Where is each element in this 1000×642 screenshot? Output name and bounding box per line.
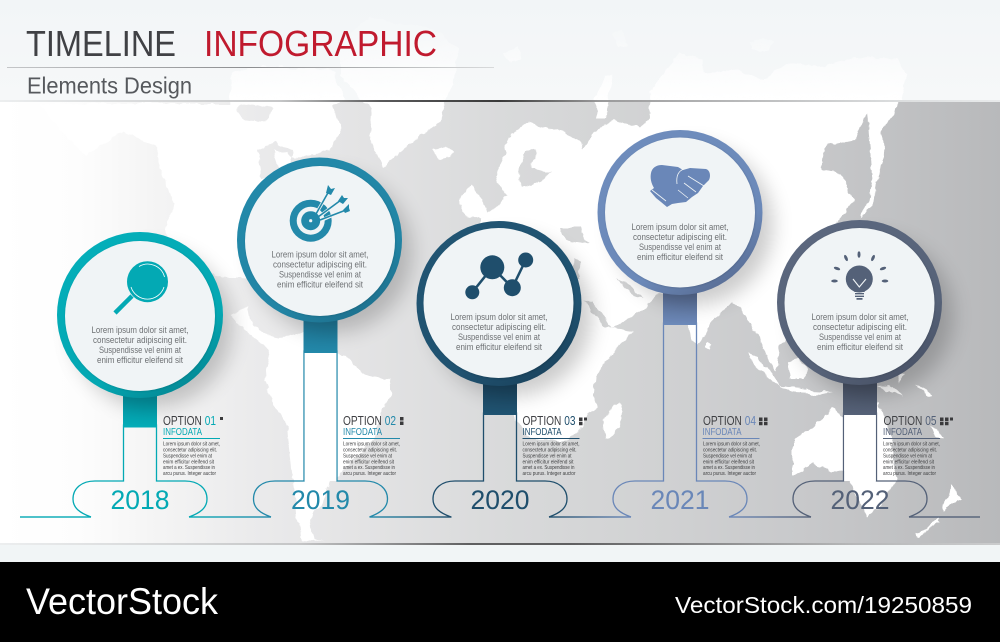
circle shadow 2019 <box>252 173 412 333</box>
option text 2018: Suspendisse vel enim at <box>163 453 212 459</box>
year 2019: 2019 <box>291 485 350 515</box>
circle ring 2018 <box>57 232 223 398</box>
pole and bracket 2021 <box>613 323 747 517</box>
option text 2019: arcu purus. Integer auctor <box>343 471 396 477</box>
circle shadow 2021 <box>613 145 773 305</box>
option text 2018: consectetur adipiscing elit. <box>163 448 217 454</box>
circle ring 2021 <box>598 130 762 295</box>
icon: target with arrows <box>290 185 350 242</box>
milestone 2020 <box>416 221 592 517</box>
body text 2021: Lorem ipsum dolor sit amet, <box>632 222 728 232</box>
body text 2019: Suspendisse vel enim at <box>279 270 361 280</box>
year 2020: 2020 <box>471 485 529 515</box>
pole block 2019 <box>304 316 338 353</box>
option text 2018: OPTION 01 <box>163 414 216 428</box>
pole and bracket 2018 <box>73 425 207 517</box>
body text 2018: Suspendisse vel enim at <box>99 345 181 355</box>
title: INFOGRAPHIC <box>204 23 437 64</box>
year 2018: 2018 <box>111 485 169 515</box>
body text 2022 <box>812 312 908 352</box>
title: TIMELINE <box>26 23 176 64</box>
main background panel <box>0 101 1000 545</box>
body text 2019 <box>272 250 368 290</box>
body text 2020: consectetur adipiscing elit. <box>452 322 546 332</box>
body text 2019: enim efficitur eleifend sit <box>277 280 363 290</box>
pole and bracket 2020 <box>433 413 567 517</box>
circle face 2018 <box>65 241 215 391</box>
option text 2022: Lorem ipsum dolor sit amet, <box>883 442 940 448</box>
subtitle: Elements Design <box>27 72 192 98</box>
circle shadow 2022 <box>793 236 953 396</box>
circle face 2019 <box>245 166 395 316</box>
option text 2022 <box>883 414 953 477</box>
circle ring 2020 <box>416 221 582 386</box>
option text 2018: amet a ex. Suspendisse in <box>163 465 215 471</box>
circle ring 2019 <box>237 158 402 322</box>
milestone 2021 <box>598 130 773 517</box>
world map <box>40 18 961 542</box>
body text 2020 <box>450 312 548 352</box>
year 2021: 2021 <box>651 485 709 515</box>
year 2022: 2022 <box>831 485 889 515</box>
circle face 2022 <box>784 228 934 378</box>
option text 2021: amet a ex. Suspendisse in <box>703 465 755 471</box>
body text 2021: enim efficitur eleifend sit <box>637 252 723 262</box>
pole interior 2022 <box>844 415 876 481</box>
body text 2020: Suspendisse vel enim at <box>458 332 540 342</box>
option text 2019: amet a ex. Suspendisse in <box>343 465 395 471</box>
option text 2020: arcu purus. Integer auctor <box>522 471 576 477</box>
title <box>26 23 437 64</box>
pole block 2018 <box>123 390 157 428</box>
body text 2021: Suspendisse vel enim at <box>639 242 721 252</box>
body text 2019: consectetur adipiscing elit. <box>273 260 367 270</box>
header band <box>0 0 1000 101</box>
circle shadow 2020 <box>432 236 592 396</box>
circle face 2021 <box>605 138 755 288</box>
footer-side rule <box>0 543 1000 545</box>
icon: handshake <box>650 165 710 207</box>
body text 2018: enim efficitur eleifend sit <box>97 355 183 365</box>
header bottom rule <box>0 100 1000 102</box>
option text 2021: OPTION 04 <box>703 414 756 428</box>
lower light band <box>0 545 1000 562</box>
body text 2022: enim efficitur eleifend sit <box>817 342 903 352</box>
option text 2020: enim efficitur eleifend sit <box>522 459 574 465</box>
option text 2019: Suspendisse vel enim at <box>343 453 392 459</box>
option text 2021: Suspendisse vel enim at <box>703 453 752 459</box>
footer bar <box>0 562 1000 642</box>
pole and bracket 2022 <box>793 413 927 517</box>
option text 2022: INFODATA <box>883 427 922 438</box>
icon: magnifier <box>115 261 168 313</box>
option text 2022: OPTION 05 <box>884 414 937 428</box>
body text 2021 <box>632 222 728 262</box>
body text 2022: Suspendisse vel enim at <box>819 332 901 342</box>
option text 2018 <box>163 414 223 477</box>
body text 2019: Lorem ipsum dolor sit amet, <box>272 250 368 260</box>
pole interior 2019 <box>305 353 336 481</box>
pole block 2020 <box>483 378 517 415</box>
pole block 2021 <box>663 288 697 325</box>
body text 2018 <box>92 325 188 365</box>
pole and bracket 2019 <box>254 351 388 517</box>
option text 2022: consectetur adipiscing elit. <box>883 448 937 454</box>
option text 2019: INFODATA <box>343 427 382 438</box>
body text 2018: Lorem ipsum dolor sit amet, <box>92 325 188 335</box>
icon: network nodes <box>465 252 533 299</box>
body text 2022: Lorem ipsum dolor sit amet, <box>812 312 908 322</box>
milestone 2018 <box>57 232 232 517</box>
option text 2022: amet a ex. Suspendisse in <box>883 465 935 471</box>
circle ring 2022 <box>777 220 942 385</box>
option text 2020: OPTION 03 <box>522 414 576 428</box>
option text 2018: Lorem ipsum dolor sit amet, <box>163 442 220 448</box>
body text 2022: consectetur adipiscing elit. <box>813 322 907 332</box>
option text 2019: OPTION 02 <box>343 414 396 428</box>
option text 2018: INFODATA <box>163 427 202 438</box>
icon: light bulb <box>831 251 888 300</box>
footer logo text: VectorStock <box>26 581 218 622</box>
option text 2021: Lorem ipsum dolor sit amet, <box>703 442 760 448</box>
option text 2020: consectetur adipiscing elit. <box>522 448 576 454</box>
pole block 2022 <box>843 378 877 415</box>
option text 2020: Suspendisse vel enim at <box>522 453 572 459</box>
option text 2020: Lorem ipsum dolor sit amet, <box>522 442 580 448</box>
option text 2020: INFODATA <box>522 427 562 438</box>
option text 2019 <box>343 414 404 477</box>
body text 2018: consectetur adipiscing elit. <box>93 335 187 345</box>
option text 2022: enim efficitur eleifend sit <box>883 459 935 465</box>
option text 2021 <box>702 414 768 477</box>
option text 2019: consectetur adipiscing elit. <box>343 448 397 454</box>
option text 2019: enim efficitur eleifend sit <box>343 459 395 465</box>
option text 2018: enim efficitur eleifend sit <box>163 459 215 465</box>
option text 2022: arcu purus. Integer auctor <box>883 471 936 477</box>
option text 2022: Suspendisse vel enim at <box>883 453 932 459</box>
option text 2019: Lorem ipsum dolor sit amet, <box>343 442 400 448</box>
option text 2020 <box>522 414 587 477</box>
body text 2020: Lorem ipsum dolor sit amet, <box>450 312 548 322</box>
option text 2021: arcu purus. Integer auctor <box>703 471 756 477</box>
option text 2021: consectetur adipiscing elit. <box>703 448 757 454</box>
circle shadow 2018 <box>72 248 232 408</box>
milestone 2022 <box>777 220 953 517</box>
circle face 2020 <box>424 228 574 378</box>
milestone 2019 <box>237 158 412 517</box>
option text 2021: INFODATA <box>702 427 742 438</box>
header divider <box>7 67 494 68</box>
footer reference text: VectorStock.com/19250859 <box>675 592 972 618</box>
option text 2020: amet a ex. Suspendisse in <box>522 465 575 471</box>
body text 2020: enim efficitur eleifend sit <box>456 342 542 352</box>
option text 2021: enim efficitur eleifend sit <box>703 459 755 465</box>
timeline connectors <box>20 516 980 518</box>
option text 2018: arcu purus. Integer auctor <box>163 471 216 477</box>
body text 2021: consectetur adipiscing elit. <box>633 232 727 242</box>
